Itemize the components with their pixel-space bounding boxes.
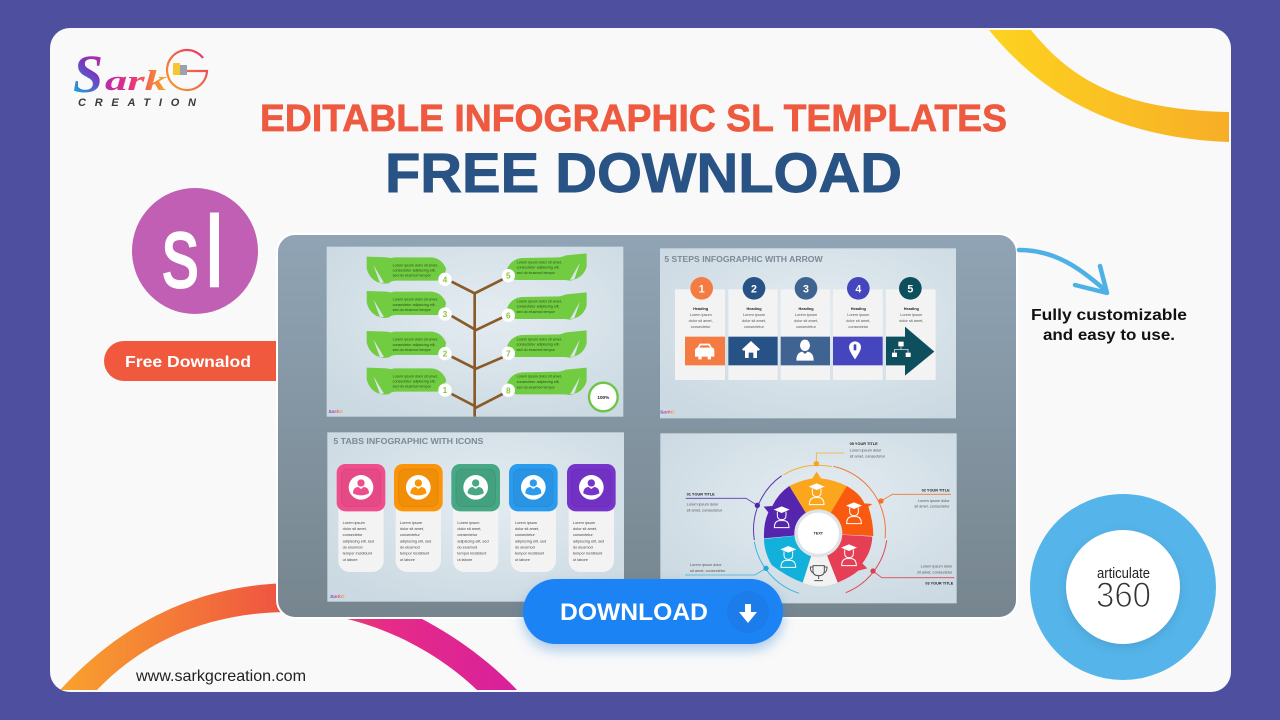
callout: fully customizable: Fully customizable: [1031, 307, 1187, 324]
callout 05: Lorem ipsum dolor: [850, 449, 882, 453]
leaf text: consectetur adipiscing elit,: [517, 380, 560, 384]
numbered nodes: 7: [506, 348, 511, 358]
tab text: consectetur: [400, 533, 421, 537]
numbered nodes: 1: [443, 385, 448, 395]
tab text: Lorem ipsum: [343, 521, 365, 525]
step text: Lorem ipsum: [900, 313, 922, 317]
icon: Storyline sl badge: s: [162, 195, 199, 309]
callout 01: sit amet, consectetur: [687, 509, 723, 513]
step number circles: 3: [803, 283, 809, 295]
leaf text: sed do eiusmod tempor: [517, 310, 556, 314]
arrow: curved blue pointer: [1019, 250, 1107, 293]
brand number: 360: [1096, 576, 1151, 615]
tab text: ut labore: [457, 558, 472, 562]
step bars and arrow: [685, 327, 934, 376]
step cards: [675, 289, 936, 380]
step text: dolor sit amet,: [689, 319, 713, 323]
tab text: do eiusmod: [573, 545, 593, 549]
tab text: dolor sit amet,: [400, 527, 424, 531]
tab text: [343, 521, 604, 562]
step number circles: 1: [699, 283, 705, 295]
tab text: dolor sit amet,: [573, 527, 597, 531]
tab pink: [337, 464, 385, 511]
icon: Storyline sl badge: l: [203, 194, 226, 309]
outer ring arcs: [754, 465, 887, 593]
step text: Lorem ipsum: [743, 313, 765, 317]
callout 04: sit amet, consectetur: [690, 569, 726, 573]
step text: [689, 307, 923, 329]
leaf text: consectetur adipiscing elit,: [393, 343, 436, 347]
free download label: Free Downalod: [125, 354, 251, 371]
step text: Heading: [798, 307, 814, 311]
free download label: [104, 341, 277, 381]
callout 02: [878, 489, 951, 508]
tab text: Lorem ipsum: [573, 521, 595, 525]
leaf text: sed do eiusmod tempor: [393, 348, 432, 352]
tab text: consectetur: [573, 533, 594, 537]
tab text: tempor incididunt: [343, 551, 373, 555]
tab blue: [509, 464, 558, 511]
tab text: tempor incididunt: [573, 551, 603, 555]
wheel center: [794, 509, 842, 557]
callout 02: sit amet, consectetur: [914, 504, 950, 508]
callout 04: [685, 563, 769, 575]
callout 03: sit amet, consectetur: [917, 570, 953, 574]
callout 01: [686, 493, 760, 513]
tab text: adipiscing elit, sed: [573, 539, 604, 543]
brand name: articulate: [1097, 565, 1150, 582]
tab text: Lorem ipsum: [400, 521, 422, 525]
leaf text: Lorem ipsum dolor sit amet,: [393, 298, 438, 302]
tab text: Lorem ipsum: [515, 521, 537, 525]
tab text: do eiusmod: [343, 545, 362, 549]
callout 03: 03 YOUR TITLE: [925, 581, 954, 585]
mini logo: SarkG: [330, 594, 345, 600]
tab text: do eiusmod: [457, 545, 477, 549]
leaf text: sed do eiusmod tempor: [517, 271, 556, 275]
tab text: dolor sit amet,: [457, 527, 481, 531]
graduate icons: [774, 483, 862, 567]
step text: Heading: [904, 307, 920, 311]
progress badge: [589, 383, 618, 411]
tab text: tempor incididunt: [515, 551, 545, 555]
logo: Sark G Creation: [73, 44, 207, 109]
title line 2: FREE DOWNLOAD: [385, 141, 902, 204]
callout 05: [814, 442, 886, 466]
leaf text: sed do eiusmod tempor: [393, 274, 432, 278]
logo S: S: [73, 44, 103, 104]
title: [260, 98, 1007, 204]
panel: template previews: [277, 234, 1017, 618]
icon: hierarchy: [892, 342, 911, 357]
numbered nodes: 8: [506, 385, 511, 395]
leaf text: consectetur adipiscing elit,: [517, 305, 560, 309]
slide heading: 5 STEPS INFOGRAPHIC WITH ARROW: [664, 255, 823, 264]
step text: Lorem ipsum: [795, 313, 817, 317]
callout 03: Lorem ipsum dolor: [921, 565, 953, 569]
icon: house: [742, 341, 760, 358]
leaf text: Lorem ipsum dolor sit amet,: [517, 375, 562, 379]
step text: Heading: [693, 307, 709, 311]
tab text: adipiscing elit, sed: [343, 539, 374, 543]
leaf text: consectetur adipiscing elit,: [393, 269, 436, 273]
tab text: consectetur: [515, 533, 536, 537]
icon: car: [695, 344, 714, 359]
leaf text: Lorem ipsum dolor sit amet,: [517, 337, 562, 341]
decorative yellow arc: [989, 30, 1229, 142]
tab text: tempor incididunt: [400, 551, 430, 555]
slide: tree infographic: [327, 247, 623, 417]
step text: consectetur: [744, 325, 765, 329]
tab green: [451, 464, 500, 511]
mini logo: SarkG: [660, 409, 675, 415]
callout: fully customizable: and easy to use.: [1043, 327, 1175, 344]
tab text: do eiusmod: [515, 545, 535, 549]
logo G with brush: [167, 50, 207, 90]
step text: consectetur: [848, 325, 869, 329]
leaf text: Lorem ipsum dolor sit amet,: [517, 299, 562, 303]
tab body cards: [338, 500, 614, 572]
tab text: do eiusmod: [400, 545, 420, 549]
tab text: tempor incididunt: [457, 551, 487, 555]
tab text: ut labore: [343, 558, 358, 562]
leaf text: sed do eiusmod tempor: [393, 385, 432, 389]
tab text: Lorem ipsum: [457, 521, 479, 525]
icon: location pin: [849, 341, 861, 359]
numbered nodes: 4: [443, 274, 448, 284]
leaf text: Lorem ipsum dolor sit amet,: [393, 374, 438, 378]
leaf text: sed do eiusmod tempor: [517, 348, 556, 352]
step number circles: 2: [751, 283, 757, 295]
callout 04: Lorem ipsum dolor: [690, 563, 722, 567]
wheel segments: [764, 472, 873, 586]
download button: [523, 579, 783, 644]
leaf text: consectetur adipiscing elit,: [393, 303, 436, 307]
leaf text: Lorem ipsum dolor sit amet,: [393, 338, 438, 342]
button label: DOWNLOAD: [560, 599, 708, 626]
tab text: consectetur: [457, 533, 478, 537]
step text: Lorem ipsum: [690, 313, 712, 317]
icon: down arrow: [727, 591, 769, 633]
leaf text: consectetur adipiscing elit,: [517, 343, 560, 347]
leaf text: sed do eiusmod tempor: [393, 308, 432, 312]
tab text: ut labore: [515, 558, 530, 562]
leaf text: [393, 260, 562, 389]
callout 05: sit amet, consectetur: [850, 454, 886, 458]
step text: dolor sit amet,: [794, 319, 818, 323]
icon: trophy: [810, 566, 827, 581]
tab purple: [567, 464, 616, 511]
mini logo: SarkG: [328, 409, 343, 415]
step text: dolor sit amet,: [899, 319, 923, 323]
right leaves: [507, 253, 587, 395]
callout 02: 02 YOUR TITLE: [922, 489, 950, 493]
step text: consectetur: [691, 325, 711, 329]
badge: articulate 360: [1030, 494, 1216, 680]
callout 01: Lorem ipsum dolor: [687, 503, 719, 507]
logo subtitle: CREATION: [78, 97, 197, 109]
callout 02: Lorem ipsum dolor: [918, 499, 950, 503]
icon: person: [796, 340, 814, 361]
callout 05: 05 YOUR TITLE: [850, 442, 878, 446]
tab text: dolor sit amet,: [343, 527, 367, 531]
numbered nodes: 2: [443, 349, 448, 359]
decorative orange and pink arc: [60, 583, 517, 690]
left leaves: [367, 257, 446, 395]
slide heading: 5 TABS INFOGRAPHIC WITH ICONS: [333, 437, 484, 446]
numbered nodes: 6: [506, 310, 511, 320]
callout: fully customizable: [1031, 307, 1187, 344]
website address: www.sarkgcreation.com: [135, 668, 306, 685]
callout 01: 01 YOUR TITLE: [687, 493, 715, 497]
step text: Lorem ipsum: [847, 313, 869, 317]
progress badge: 100%: [597, 395, 610, 400]
tab text: adipiscing elit, sed: [400, 539, 431, 543]
step text: Heading: [746, 307, 762, 311]
step text: dolor sit amet,: [846, 319, 870, 323]
numbered nodes: [438, 269, 515, 397]
wheel center: TEXT: [814, 532, 824, 536]
slide: 5 tabs infographic: [327, 432, 624, 602]
step number circles: 5: [907, 283, 913, 295]
logo wordmark: ark: [105, 66, 167, 97]
tab text: adipiscing elit, sed: [515, 539, 546, 543]
tab text: adipiscing elit, sed: [457, 539, 489, 543]
leaf text: Lorem ipsum dolor sit amet,: [393, 263, 438, 267]
tab text: dolor sit amet,: [515, 527, 539, 531]
step text: consectetur: [796, 325, 817, 329]
tab text: ut labore: [573, 558, 588, 562]
leaf text: consectetur adipiscing elit,: [393, 380, 436, 384]
tab orange: [394, 464, 443, 511]
step number circles: 4: [855, 283, 861, 295]
tab text: ut labore: [400, 558, 415, 562]
slide: circular infographic: [660, 433, 957, 603]
leaf text: consectetur adipiscing elit,: [517, 266, 560, 270]
title line 1: EDITABLE INFOGRAPHIC SL TEMPLATES: [260, 98, 1007, 140]
numbered nodes: 5: [506, 271, 511, 281]
step text: Heading: [851, 307, 867, 311]
icon: Storyline sl badge: [132, 188, 258, 314]
leaf text: Lorem ipsum dolor sit amet,: [517, 260, 562, 264]
tree branches: [452, 279, 503, 417]
slide: 5 steps infographic: [660, 248, 956, 418]
leaf text: sed do eiusmod tempor: [517, 385, 556, 389]
step number circles: [690, 277, 922, 300]
step text: dolor sit amet,: [742, 319, 766, 323]
tab text: consectetur: [343, 533, 363, 537]
numbered nodes: 3: [443, 309, 448, 319]
callout 03: [870, 565, 954, 585]
